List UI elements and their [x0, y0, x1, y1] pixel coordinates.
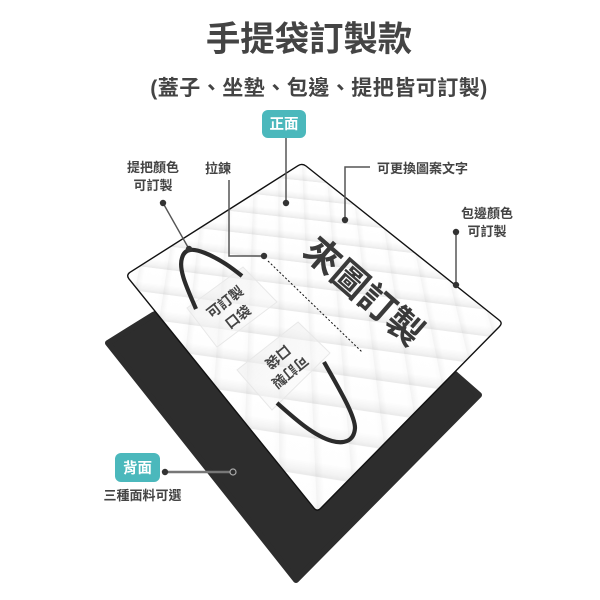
callout: handle colour: [160, 200, 192, 252]
label: handle colour: 提把顏色: [127, 160, 179, 175]
callout: replaceable pattern: [342, 167, 370, 223]
label: handle colour: [127, 160, 179, 193]
pocket 1: 可訂製: [204, 283, 246, 321]
label: three fabrics: 三種面料可選: [103, 488, 182, 503]
label: edge colour: 可訂製: [467, 224, 507, 239]
label: handle colour: 可訂製: [133, 178, 173, 193]
badge: back: 背面: [123, 459, 152, 477]
pocket 2: 口袋: [262, 342, 294, 372]
pocket 2: 可訂製: [269, 353, 311, 391]
subtitle: (蓋子、坐墊、包邊、提把皆可訂製): [150, 77, 488, 100]
handle 1: [181, 250, 242, 309]
pocket 1: [187, 267, 277, 347]
title: 手提袋訂製款: [206, 21, 412, 59]
callout: edge colour: [453, 229, 459, 288]
front panel outline: [128, 164, 501, 510]
printed text: 來圖訂製: [296, 229, 431, 354]
callout: front: [283, 138, 289, 206]
label: zipper: 拉鍊: [205, 161, 231, 176]
badge: back: [115, 453, 160, 482]
panel: white quilted front of bag: [134, 166, 496, 510]
badge: front: 正面: [270, 117, 298, 133]
handle 2: [277, 362, 355, 442]
label: replaceable pattern: 可更換圖案文字: [377, 161, 468, 176]
badge: front: [262, 110, 306, 138]
pocket 1: 口袋: [222, 302, 254, 332]
pocket 2: [237, 322, 330, 410]
callout: back: [162, 469, 236, 475]
label: edge colour: 包邊顏色: [461, 206, 513, 221]
label: edge colour: [461, 206, 513, 239]
zipper dotted line: [268, 261, 362, 352]
callout: zipper: [229, 180, 267, 259]
